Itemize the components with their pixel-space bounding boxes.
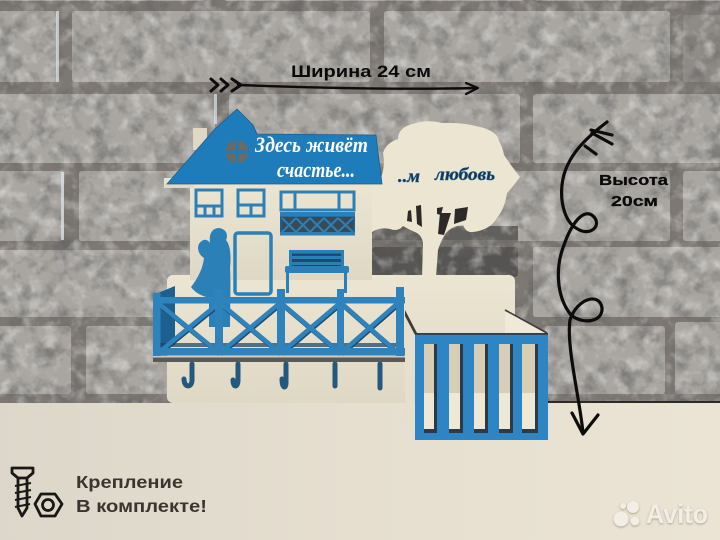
shelf — [153, 356, 406, 362]
roof text — [254, 132, 368, 182]
roof text: счастье... — [277, 157, 355, 182]
height arrow — [558, 122, 612, 434]
couple silhouette — [191, 228, 231, 327]
tree text: любовь — [434, 164, 495, 184]
roof round window — [224, 139, 250, 165]
windows — [196, 190, 354, 216]
width label: Ширина 24 см — [291, 62, 431, 81]
icon: Avito dots — [614, 501, 640, 526]
Avito watermark — [614, 499, 708, 529]
Avito watermark: Avito — [646, 499, 708, 529]
tree text — [398, 164, 495, 186]
bench — [285, 250, 349, 293]
icon: screw and nut — [12, 468, 62, 516]
text: fastener note — [76, 472, 207, 516]
roof — [167, 109, 382, 184]
tree — [372, 121, 520, 277]
height label — [599, 172, 669, 210]
fence railing — [153, 286, 405, 356]
wooden floor — [0, 403, 720, 540]
height label: 20см — [611, 193, 658, 210]
text: fastener note: В комплекте! — [76, 496, 207, 516]
text: fastener note: Крепление — [76, 472, 183, 492]
height label: Высота — [599, 172, 669, 189]
shadowed bricks seen through the tree cut-out — [372, 226, 518, 240]
tree branch gaps — [407, 205, 468, 235]
roof text: Здесь живёт — [254, 132, 368, 157]
wooden box planter — [405, 310, 548, 440]
hooks — [184, 364, 380, 388]
balcony — [280, 212, 355, 236]
key holder product — [153, 109, 520, 403]
brick wall background — [0, 0, 720, 405]
tree text: ..м — [398, 166, 420, 186]
width arrow — [211, 79, 478, 94]
door — [235, 233, 271, 294]
fastener note — [12, 468, 207, 516]
wood backboard: house — [164, 128, 515, 403]
